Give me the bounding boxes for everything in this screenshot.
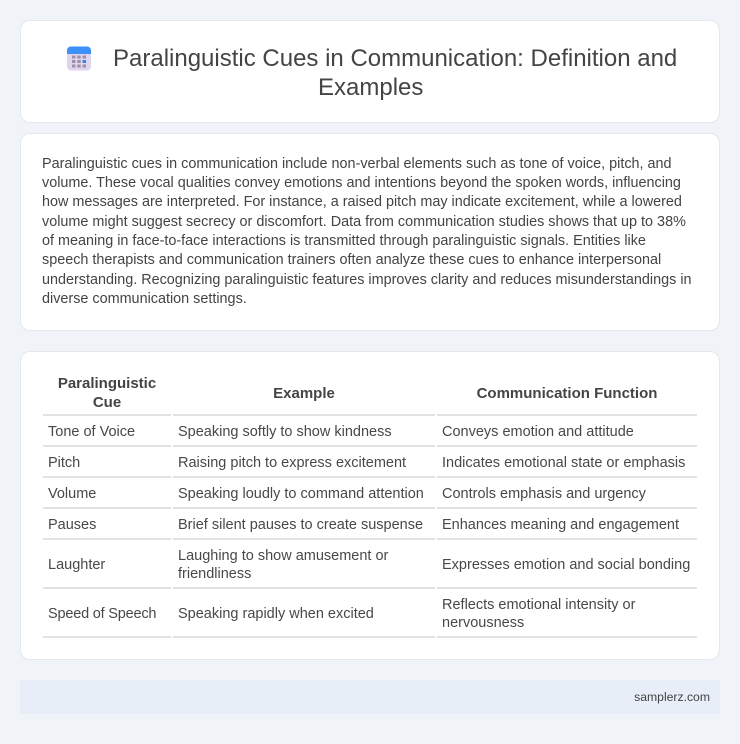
row: pitch: Indicates emotional state or emphasis	[442, 455, 685, 471]
row: laughter: Laughter	[48, 557, 105, 573]
row: volume: Controls emphasis and urgency	[442, 486, 646, 502]
intro text panel: of meaning in face-to-face interactions is transmitted through paralinguistic signals. Entities like	[42, 233, 646, 249]
column headers: Communication Function	[477, 385, 657, 402]
row: speed of speech: Reflects emotional intensity or	[442, 597, 635, 613]
row: pitch: Pitch	[48, 455, 80, 471]
row: volume	[48, 486, 646, 502]
footer text: samplerz.com	[634, 690, 710, 704]
title	[113, 45, 677, 101]
row: laughter	[48, 548, 690, 582]
intro text panel	[20, 133, 720, 331]
column headers	[58, 375, 657, 411]
intro text panel: diverse communication settings.	[42, 291, 247, 307]
row: speed of speech	[48, 597, 636, 631]
row: laughter: Expresses emotion and social bonding	[442, 557, 690, 573]
row: speed of speech: nervousness	[442, 615, 524, 631]
row: pauses: Enhances meaning and engagement	[442, 517, 679, 533]
row: speed of speech: Speaking rapidly when excited	[178, 606, 374, 622]
row: pitch: Raising pitch to express excitement	[178, 455, 406, 471]
row: tone of voice: Speaking softly to show kindness	[178, 424, 392, 440]
intro text panel: speech therapists and communication trainers often analyze these cues to enhance interpersonal	[42, 252, 661, 268]
row: tone of voice	[48, 424, 634, 440]
title: Examples	[318, 74, 423, 101]
intro text panel: understanding. Recognizing paralinguistic features improves clarity and reduces misunderstandings in	[42, 272, 692, 288]
row: volume: Volume	[48, 486, 96, 502]
row: pauses: Pauses	[48, 517, 96, 533]
column headers: Paralinguistic	[58, 375, 156, 392]
row: pauses	[48, 517, 679, 533]
intro text panel: volume. These vocal qualities convey emotions and intentions beyond the spoken words, influencing	[42, 175, 681, 191]
column headers: Cue	[93, 394, 121, 411]
row: laughter: friendliness	[178, 566, 251, 582]
row: volume: Speaking loudly to command attention	[178, 486, 424, 502]
table	[43, 375, 697, 638]
row: pauses: Brief silent pauses to create suspense	[178, 517, 423, 533]
title: Paralinguistic Cues in Communication: Definition and	[113, 45, 677, 72]
table panel	[20, 351, 720, 660]
footer bar	[20, 680, 720, 714]
row: laughter: Laughing to show amusement or	[178, 548, 388, 564]
intro text panel: Paralinguistic cues in communication include non-verbal elements such as tone of voice, pitch, and	[42, 156, 672, 172]
row: speed of speech: Speed of Speech	[48, 606, 156, 622]
intro text panel: volume might suggest secrecy or discomfort. Data from communication studies shows that up to 38%	[42, 214, 686, 230]
header panel	[20, 20, 720, 123]
column headers: Example	[273, 385, 335, 402]
row: tone of voice: Conveys emotion and attitude	[442, 424, 634, 440]
icon: calendar	[67, 46, 91, 70]
row: tone of voice: Tone of Voice	[48, 424, 135, 440]
intro text panel: how messages are interpreted. For instance, a raised pitch may indicate excitement, while a lowered	[42, 194, 682, 210]
row: pitch	[48, 455, 685, 471]
